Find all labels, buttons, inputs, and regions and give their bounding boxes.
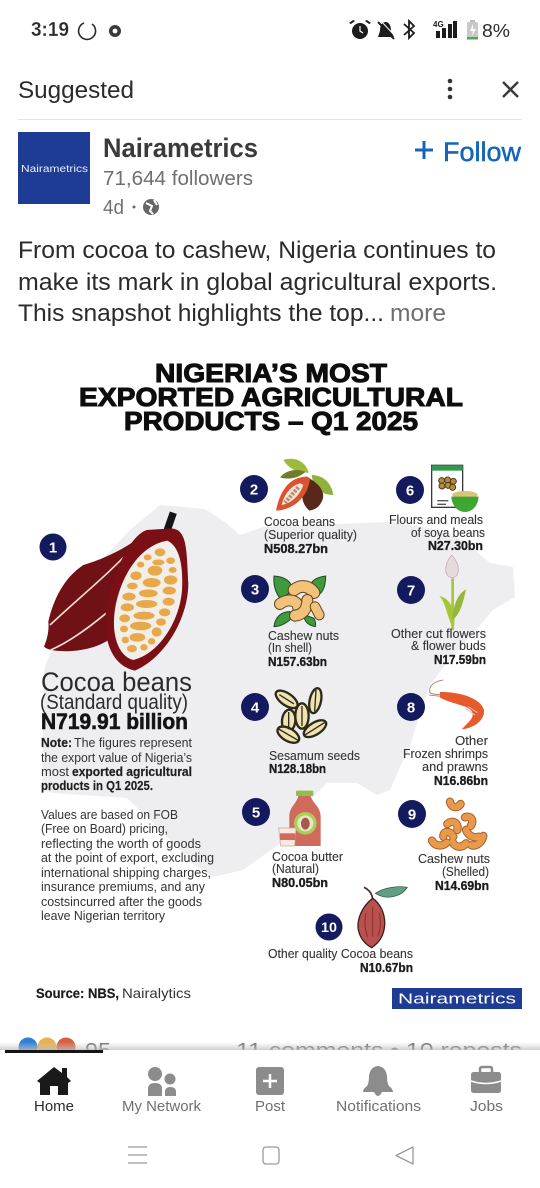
battery percentage: 8% <box>482 21 510 41</box>
post caption: This snapshot highlights the top... <box>18 300 384 327</box>
heading: Suggested: Suggested <box>18 77 134 104</box>
item 6 label <box>389 512 485 553</box>
number badge 5: 5 <box>252 804 260 822</box>
nav: notifications <box>336 1066 421 1115</box>
item 7 label: N17.59bn <box>434 652 486 667</box>
item 3 label: Cashew nuts <box>268 628 339 643</box>
item 8 label: Other <box>455 733 489 748</box>
item 7 label <box>391 626 486 667</box>
item 4: sesamum seeds <box>241 687 360 776</box>
icon: tulip <box>439 555 466 630</box>
post age: 4d <box>103 197 124 219</box>
item 4 label: N128.18bn <box>269 761 326 776</box>
note text <box>41 735 192 793</box>
item 2 label: (Superior quality) <box>264 527 357 542</box>
status bar <box>31 19 510 41</box>
icon: battery <box>467 20 478 40</box>
nav: post <box>255 1067 286 1115</box>
title: EXPORTED AGRICULTURAL <box>79 382 463 412</box>
suggested header <box>18 77 522 120</box>
item 9 label: Cashew nuts <box>418 851 490 866</box>
icon: loading spinner <box>79 23 96 39</box>
nav: notifications: Notifications <box>336 1098 421 1115</box>
item 7 label: Other cut flowers <box>391 626 486 641</box>
brand badge: Nairametrics <box>398 990 516 1008</box>
FOB explanation text: leave Nigerian territory <box>41 908 165 923</box>
number badge 8: 8 <box>407 700 415 716</box>
item 10: other quality cocoa beans <box>268 887 413 975</box>
title <box>79 358 463 436</box>
author name: Nairametrics <box>103 133 258 163</box>
title: NIGERIA’S MOST <box>155 358 387 388</box>
item 2 label: Cocoa beans <box>264 514 335 529</box>
FOB explanation text: costsincurred after the goods <box>41 894 202 909</box>
number badge 2: 2 <box>250 482 258 498</box>
nav: my network <box>122 1067 201 1115</box>
item 5 label: N80.05bn <box>272 875 328 890</box>
note text: Note: <box>41 735 72 750</box>
icon: more menu <box>448 79 452 99</box>
bottom navigation <box>0 1042 540 1188</box>
item 9: cashew nuts shelled <box>398 800 490 893</box>
item 8 label: and prawns <box>422 759 488 774</box>
reaction icons <box>18 1038 76 1056</box>
FOB explanation text: international shipping charges, <box>41 865 211 880</box>
number badge 10 <box>316 914 342 940</box>
item 7 label: & flower buds <box>411 638 486 653</box>
icon: shelled cashews <box>432 802 483 847</box>
post caption <box>18 237 497 327</box>
item 3 label: (In shell) <box>268 640 312 655</box>
item 9 label: N14.69bn <box>435 878 489 893</box>
item 8: frozen shrimps <box>397 680 489 788</box>
item 4 label <box>269 748 360 776</box>
item 4 label: Sesamum seeds <box>269 748 360 763</box>
item 2 label <box>264 514 357 556</box>
item 5: cocoa butter <box>242 791 344 890</box>
item 10 label: N10.67bn <box>360 960 413 975</box>
post caption: From cocoa to cashew, Nigeria continues to <box>18 237 496 264</box>
icon: shrimp <box>429 680 484 729</box>
source line: Nairalytics <box>122 985 191 1001</box>
item 9 label <box>418 851 490 893</box>
item 1 label: (Standard quality) <box>40 691 188 714</box>
item 1 label: N719.91 billion <box>41 709 188 734</box>
nav: my network: My Network <box>122 1098 201 1115</box>
brand badge <box>392 988 522 1009</box>
icon: 4G signal: 4G <box>433 20 444 29</box>
reactions row <box>18 1038 522 1062</box>
author block <box>18 132 521 219</box>
nav: jobs: Jobs <box>470 1098 503 1115</box>
logo <box>18 132 90 204</box>
map of Nigeria background <box>42 505 515 877</box>
icon: cocoa butter bottle <box>279 791 321 846</box>
note text: most <box>41 764 69 779</box>
note text: The figures represent <box>74 735 192 750</box>
item 3 label <box>268 628 339 669</box>
item 9 label: (Shelled) <box>442 864 489 879</box>
infographic <box>36 358 522 1009</box>
icon: open cocoa pod <box>44 513 188 671</box>
nav: home <box>34 1067 74 1115</box>
nav: jobs <box>470 1067 503 1115</box>
note text: exported agricultural <box>72 764 192 779</box>
icon: close <box>503 82 518 97</box>
icon: back triangle <box>396 1147 413 1164</box>
number badge 1: 1 <box>49 540 57 556</box>
nav: post: Post <box>255 1098 286 1115</box>
icon: soya bag and bowl <box>432 465 479 512</box>
item 6 label: Flours and meals <box>389 512 483 527</box>
item 5 label <box>272 849 344 890</box>
number badge 10: 10 <box>321 919 337 935</box>
logo: Nairametrics <box>21 164 88 175</box>
item 10 label: Other quality Cocoa beans <box>268 946 413 961</box>
number badge 9: 9 <box>408 806 416 824</box>
icon: home square <box>263 1147 279 1164</box>
item 3 label: N157.63bn <box>268 654 327 669</box>
FOB explanation text: at the point of export, excluding <box>41 850 214 865</box>
icon: alarm <box>349 20 371 39</box>
item 8 label <box>403 733 489 788</box>
icon: chrome <box>109 25 121 37</box>
icon: cocoa pods and leaves <box>276 459 333 511</box>
FOB explanation text: (Free on Board) pricing, <box>41 821 168 836</box>
item 2 label: N508.27bn <box>264 541 328 556</box>
FOB explanation text: reflecting the worth of goods <box>41 836 201 851</box>
note text: products in Q1 2025. <box>41 778 153 793</box>
icon: cashew with leaves <box>274 576 326 627</box>
icon: recents <box>128 1147 147 1163</box>
title: PRODUCTS – Q1 2025 <box>124 406 418 436</box>
clock time: 3:19 <box>31 19 69 41</box>
item 1: cocoa beans standard <box>40 513 192 734</box>
comments and reposts: 11 comments • 10 reposts <box>236 1040 522 1062</box>
FOB explanation text <box>41 807 214 923</box>
item 3: cashew nuts in shell <box>241 575 339 669</box>
nav: home: Home <box>34 1098 74 1115</box>
post caption: more <box>390 300 446 327</box>
icon: sesame seeds <box>273 687 329 746</box>
reaction count: 95 <box>85 1040 111 1062</box>
item 8 label: Frozen shrimps <box>403 746 488 761</box>
item 1 label <box>40 667 192 734</box>
follow button: Follow <box>443 137 521 167</box>
number badge 1 <box>40 534 66 560</box>
item 5 label: (Natural) <box>272 861 319 876</box>
number badge 7: 7 <box>407 582 415 600</box>
source line: Source: NBS, <box>36 985 119 1001</box>
item 6: flours and meals of soya beans <box>389 465 485 553</box>
post caption: make its mark in global agricultural exports. <box>18 269 497 296</box>
FOB explanation text: insurance premiums, and any <box>41 879 205 894</box>
android system navigation <box>128 1147 413 1164</box>
follower count: 71,644 followers <box>103 168 253 190</box>
number badge 6: 6 <box>406 482 414 500</box>
item 10 label <box>268 946 413 975</box>
FOB explanation text: Values are based on FOB <box>41 807 178 822</box>
icon: bluetooth <box>404 21 414 38</box>
item 7: cut flowers <box>391 555 486 667</box>
icon: single cocoa pod with leaf <box>358 887 407 948</box>
item 2: cocoa beans superior <box>240 459 357 556</box>
item 6 label: N27.30bn <box>428 538 483 553</box>
icon: 4G signal <box>433 20 457 38</box>
icon: globe <box>132 199 159 215</box>
number badge 3: 3 <box>251 582 259 598</box>
item 8 label: N16.86bn <box>434 773 488 788</box>
icon: muted bell <box>378 21 396 39</box>
source line <box>36 985 191 1001</box>
note text: the export value of Nigeria’s <box>41 750 192 765</box>
item 6 label: of soya beans <box>411 525 485 540</box>
number badge 4: 4 <box>251 700 260 716</box>
item 1 label: Cocoa beans <box>41 667 192 697</box>
item 5 label: Cocoa butter <box>272 849 344 864</box>
